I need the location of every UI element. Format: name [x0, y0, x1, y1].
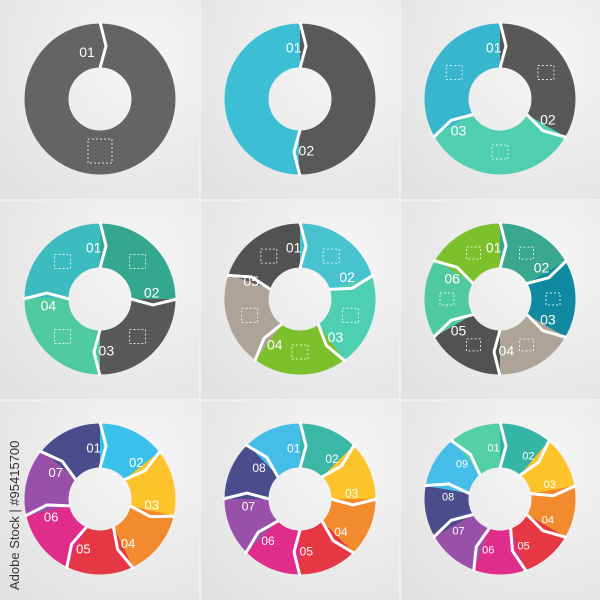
numbers: 07 — [48, 465, 63, 480]
numbers: 04 — [41, 297, 56, 313]
numbers: 05 — [451, 322, 466, 338]
text placeholder box — [88, 139, 112, 163]
number 01: 01 — [79, 44, 95, 60]
numbers: 04 — [121, 536, 135, 551]
numbers: 04 — [542, 514, 554, 526]
numbers: 05 — [76, 541, 91, 556]
numbers: 01 — [86, 440, 101, 455]
panel: 3-step donut — [427, 22, 573, 172]
panel: 8-step donut — [223, 422, 377, 576]
panel: 5-step donut — [225, 222, 375, 374]
numbers — [243, 239, 355, 352]
panel: 6-step donut — [427, 222, 573, 376]
numbers: 01 — [86, 239, 102, 255]
numbers: 06 — [261, 534, 275, 548]
numbers: 05 — [300, 545, 313, 559]
numbers: 01 — [287, 441, 301, 455]
numbers: 08 — [252, 461, 266, 475]
numbers: 01 — [286, 39, 302, 55]
numbers: 02 — [540, 111, 556, 127]
numbers: 01 — [486, 39, 502, 55]
numbers: 04 — [499, 343, 514, 359]
numbers: 01 — [488, 442, 500, 454]
numbers: 02 — [144, 285, 160, 301]
panel: 1-step donut — [46, 22, 154, 163]
numbers — [242, 441, 359, 559]
numbers: 06 — [444, 271, 460, 287]
numbers: 02 — [339, 269, 355, 285]
numbers: 04 — [267, 336, 283, 352]
panel: 9-step donut — [424, 422, 577, 574]
numbers: 08 — [442, 491, 454, 503]
numbers: 02 — [129, 455, 144, 470]
numbers: 06 — [482, 545, 494, 557]
numbers: 03 — [144, 497, 159, 512]
panel: 4-step donut — [23, 222, 177, 376]
numbers — [44, 440, 159, 556]
numbers: 09 — [456, 459, 468, 471]
numbers: 02 — [299, 143, 314, 159]
numbers: 06 — [44, 510, 58, 525]
numbers: 03 — [451, 122, 466, 138]
numbers — [442, 442, 556, 557]
numbers: 03 — [540, 311, 556, 327]
numbers: 03 — [328, 329, 343, 345]
numbers — [451, 39, 556, 138]
numbers: 03 — [345, 487, 359, 501]
numbers: 05 — [517, 540, 530, 552]
numbers: 02 — [325, 452, 339, 466]
numbers: 03 — [99, 343, 114, 359]
numbers: 02 — [534, 260, 550, 276]
numbers — [41, 239, 160, 359]
numbers: 03 — [544, 479, 556, 491]
numbers: 07 — [452, 525, 465, 537]
numbers: 05 — [243, 273, 259, 289]
numbers: 01 — [286, 239, 302, 255]
panel: 7-step donut — [24, 422, 175, 574]
numbers: 07 — [242, 499, 255, 513]
numbers — [286, 39, 314, 159]
numbers: 01 — [486, 239, 502, 255]
watermark: stock id: Adobe Stock | #95415700 — [7, 441, 22, 590]
panel: 2-step donut — [246, 22, 354, 176]
numbers: 04 — [334, 525, 348, 539]
numbers: 02 — [522, 450, 534, 462]
numbers — [444, 239, 556, 359]
